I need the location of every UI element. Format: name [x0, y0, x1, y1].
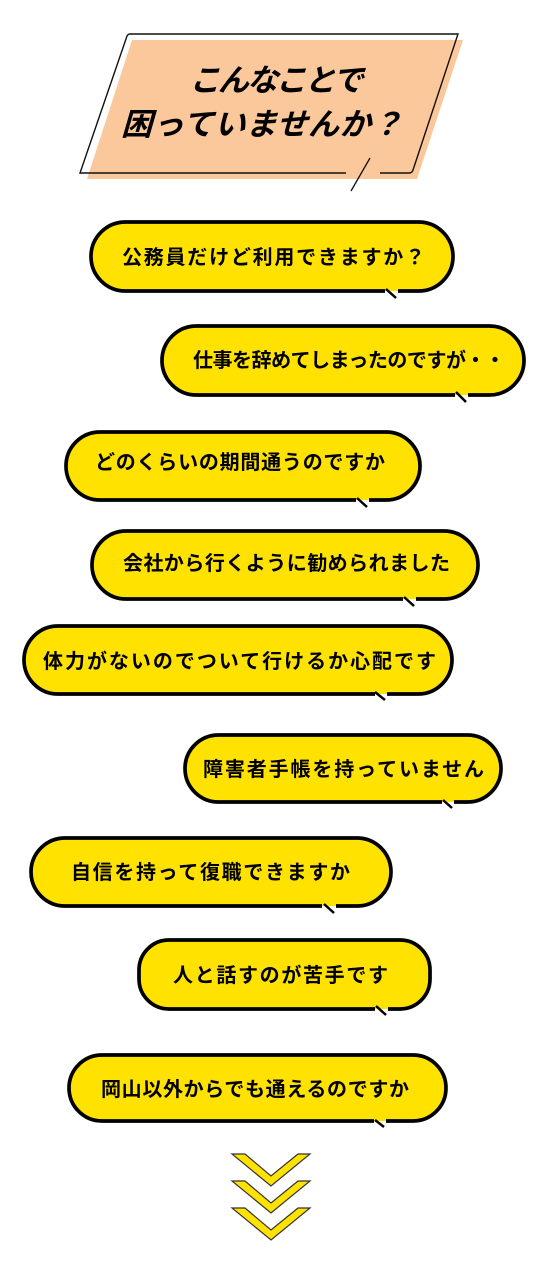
- title outline frame: [80, 34, 458, 173]
- speech bubble 8: [139, 940, 430, 1015]
- title tail stroke: [351, 158, 370, 191]
- speech bubble 6: [185, 735, 501, 808]
- speech bubble 2: 仕事を辞めてしまったのですが・・: [193, 348, 505, 372]
- title panel: [80, 34, 463, 191]
- speech bubble 9: [69, 1055, 446, 1127]
- speech bubble 1: [91, 222, 453, 298]
- speech bubble 3: どのくらいの期間通うのですか: [95, 451, 385, 474]
- speech bubble 8: 人と話すのが苦手です: [173, 963, 388, 987]
- title background parallelogram: [87, 40, 463, 179]
- speech bubble 3: [66, 432, 420, 507]
- speech bubble 4: 会社から行くように勧められました: [123, 552, 450, 575]
- speech bubble 7: [31, 838, 391, 913]
- speech bubble 5: 体力がないのでついて行けるか心配です: [43, 649, 436, 673]
- down chevron arrows: [232, 1154, 310, 1240]
- speech bubble 2: [162, 326, 524, 402]
- speech bubble 7: 自信を持って復職できますか: [71, 861, 350, 884]
- speech bubble 6: 障害者手帳を持っていません: [203, 758, 484, 781]
- title heading: [119, 63, 410, 142]
- speech bubble 4: [92, 531, 478, 606]
- speech bubble 9: 岡山以外からでも通えるのですか: [101, 1078, 409, 1101]
- speech bubble 5: [24, 626, 452, 700]
- title line 2: 困っていませんか？: [119, 107, 410, 142]
- title line 1: こんなことで: [187, 63, 371, 98]
- speech bubble 1: 公務員だけど利用できますか？: [122, 246, 425, 269]
